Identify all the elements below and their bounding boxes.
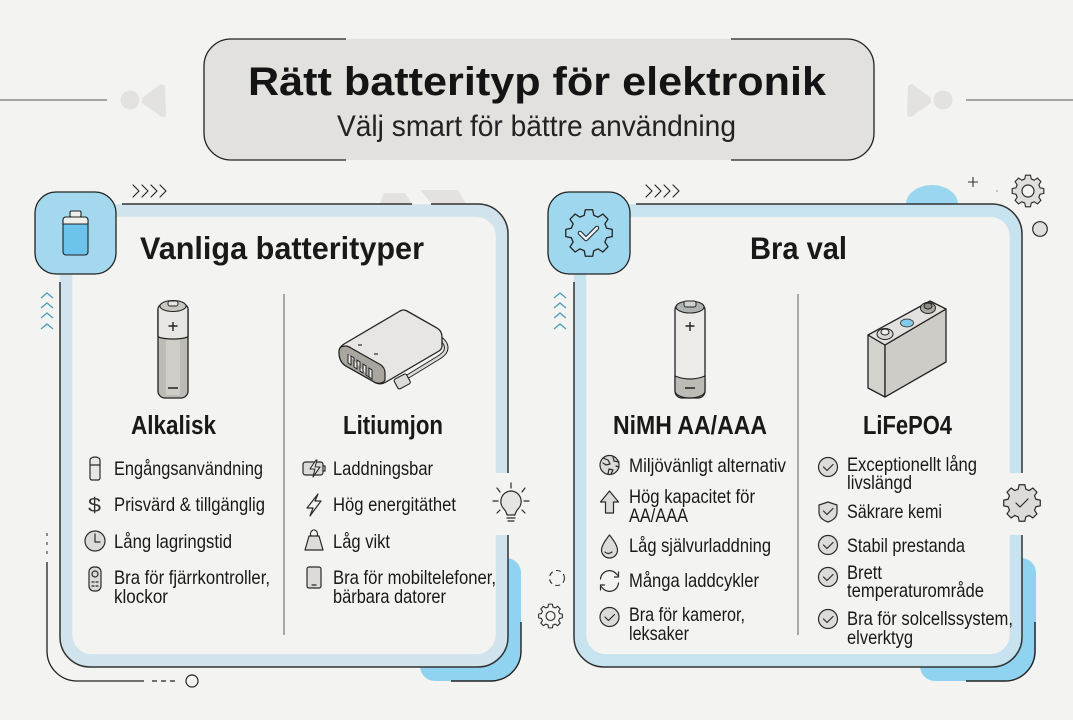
icon: lithium-ion pack	[339, 310, 446, 390]
item: Låg vikt: Låg vikt	[333, 531, 390, 553]
icon: gear check badge	[548, 192, 630, 274]
panel: Bra val	[548, 185, 1036, 681]
icon: gear check right	[1004, 485, 1040, 521]
item: Många laddcykler: Många laddcykler	[629, 570, 759, 592]
decoration: right of header	[907, 84, 1073, 117]
item: Bra för solcellssystem: elverktyg	[847, 627, 913, 649]
item: Låg vikt	[305, 530, 390, 553]
item: Lång lagringstid: Lång lagringstid	[114, 531, 232, 553]
divider	[797, 294, 799, 635]
decoration: plus and circle top right	[968, 177, 1047, 236]
item: Brett temperaturområde: Brett	[847, 562, 882, 584]
item: Exceptionellt lång livslängd: livslängd	[847, 472, 912, 494]
item: Hög kapacitet	[600, 486, 755, 527]
item: Exceptionellt lång livslängd: Exceptionellt lång	[847, 454, 977, 476]
outer frame line	[47, 562, 144, 681]
icon: gear top right	[1012, 175, 1044, 207]
header banner	[204, 39, 874, 160]
item: Laddningsbar: Laddningsbar	[333, 458, 433, 480]
item: Stabil prestanda: Stabil prestanda	[847, 535, 965, 557]
item: Brett temperaturområde: temperaturområde	[847, 580, 984, 602]
item: Bra för mobiltelefoner: bärbara datorer	[333, 586, 446, 608]
item: Låg självurladdning	[602, 535, 771, 558]
item: Hög kapacitet: Hög kapacitet för	[629, 486, 755, 508]
heading: NiMH: NiMH AA/AAA	[613, 412, 767, 440]
decoration: dashed circle	[550, 570, 564, 586]
item: Brett temperaturområde	[818, 562, 984, 602]
chevrons right	[646, 185, 679, 197]
heading: LiFePO4: LiFePO4	[863, 412, 953, 440]
accent semicircle top	[906, 185, 958, 204]
title: Rätt batterityp för elektronik	[248, 60, 827, 104]
item: Bra för fjärrkontroller	[89, 567, 270, 608]
item: Engångsanvändning: Engångsanvändning	[114, 458, 263, 480]
accent blob bottom right	[420, 558, 521, 681]
item: Bra för mobiltelefoner	[307, 567, 496, 608]
item: Prisvärd: $	[88, 495, 101, 517]
item: Bra för mobiltelefoner: Bra för mobiltelefoner,	[333, 567, 496, 589]
item: Låg självurladdning: Låg självurladdning	[629, 535, 771, 557]
icon: gear bottom left of right panel	[539, 604, 562, 628]
subtitle: Välj smart för bättre användning	[337, 110, 736, 143]
item: Bra för solcellssystem	[818, 608, 1013, 649]
item: Hög energitäthet: Hög energitäthet	[333, 494, 456, 516]
item: Bra för solcellssystem: Bra för solcellssystem,	[847, 608, 1013, 630]
item: Bra för kameror: Bra för kameror,	[629, 604, 745, 626]
divider	[283, 294, 285, 635]
item: Laddningsbar	[303, 458, 433, 480]
item: Bra för fjärrkontroller: Bra för fjärrkontroller,	[114, 567, 270, 589]
panel heading: Bra val	[750, 230, 847, 266]
item: Säkrare kemi: Säkrare kemi	[847, 501, 942, 523]
item: Exceptionellt lång livslängd	[818, 454, 977, 494]
item: Stabil prestanda	[818, 535, 965, 557]
icon: battery badge	[35, 192, 116, 274]
icon: NiMH battery	[675, 301, 705, 398]
heading: Alkalisk: Alkalisk	[131, 412, 217, 440]
panel: Vanliga batterityper	[35, 185, 522, 687]
item: Bra för fjärrkontroller: klockor	[114, 586, 168, 608]
accent blob bottom right	[920, 558, 1036, 681]
item: Säkrare kemi	[819, 501, 942, 523]
decoration: left of header	[0, 84, 166, 117]
chevrons right	[133, 185, 166, 197]
icon: LiFePO4 cell	[868, 301, 946, 397]
chevrons up	[554, 293, 566, 329]
panel heading: Vanliga batterityper	[140, 230, 424, 266]
chevrons up	[41, 293, 53, 329]
item: Bra för kameror: leksaker	[629, 623, 689, 645]
icon: alkaline battery	[158, 300, 188, 398]
item: Hög kapacitet: AA/AAA	[629, 505, 688, 527]
item: Bra för kameror	[600, 604, 745, 645]
item: Miljövänligt alternativ: Miljövänligt alternativ	[629, 455, 786, 477]
icon: lightbulb	[493, 483, 529, 521]
grey shapes above the frame	[380, 193, 412, 204]
heading: Litiumjon: Litiumjon	[343, 412, 443, 440]
item: Prisvärd: Prisvärd & tillgänglig	[114, 494, 265, 516]
